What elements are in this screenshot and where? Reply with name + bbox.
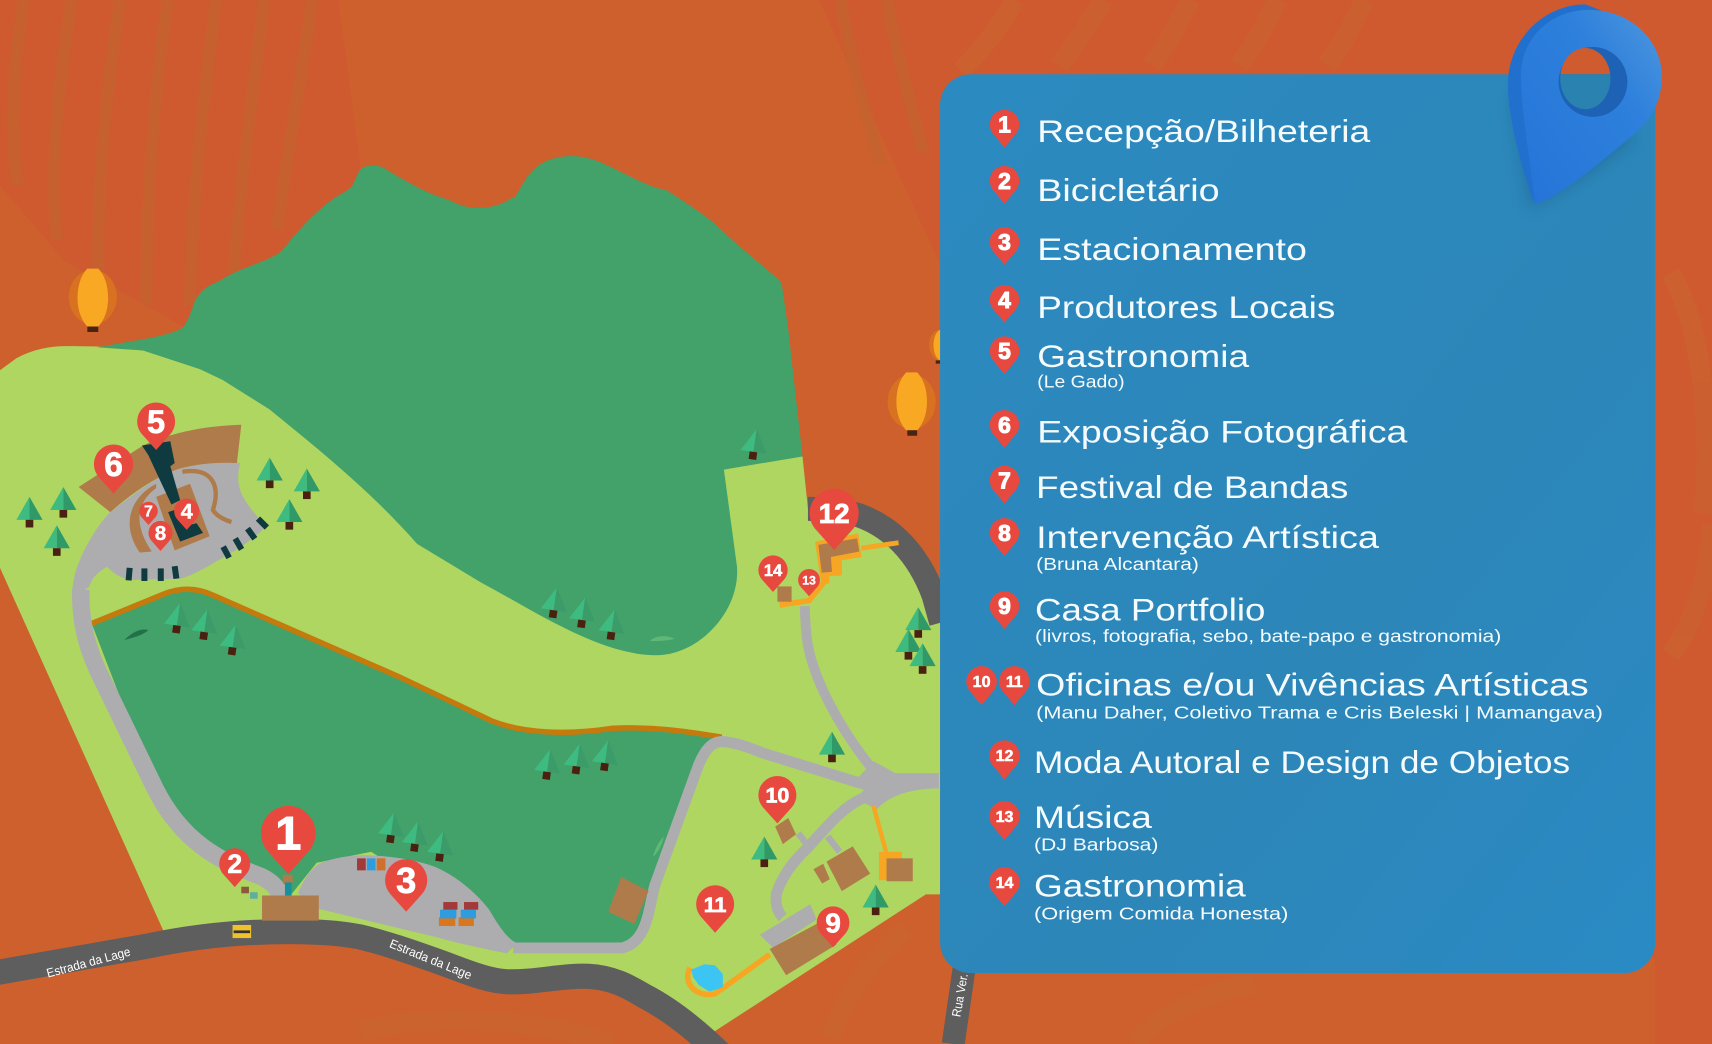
balloon left [69,269,117,332]
legend item 5: (Le Gado) [1037,372,1125,392]
legend item 1: 1 [998,112,1011,138]
legend item 7: 7 [998,468,1011,494]
legend item 2: 2 [998,168,1011,194]
map pin 13: 13 [802,573,816,587]
road labels: Rua Ver. [949,973,971,1018]
legend item 5: 5 [998,338,1011,364]
road labels: Estrada da Lage [45,945,132,981]
gray junction [857,761,939,809]
map pin 13 [798,569,820,596]
legend item 3 [990,227,1307,267]
legend item 9: 9 [998,593,1011,619]
legend item 3: 3 [998,229,1011,255]
map pin 7 [139,502,158,525]
map pin 12 [810,489,859,550]
map pin 14 [758,555,788,592]
legend item 9 [990,591,1501,646]
bushes [124,629,675,857]
brown curved path [182,471,231,522]
legend item 6: 6 [998,412,1011,438]
legend item 4 [990,285,1335,325]
bicycles [241,887,258,899]
main road: Estrada da Lage [0,932,726,1044]
panel: legend [940,74,1655,973]
legend item 1: Recepção/Bilheteria [1037,113,1371,149]
legend item 10 and 11: (Manu Daher, Coletivo Trama e Cris Beleski | Mamangava) [1036,703,1603,723]
legend item 6 [990,410,1408,449]
legend item 10 and 11: 11 [1006,673,1023,691]
map pin 3: 3 [396,860,416,901]
legend item 13 [989,799,1158,855]
orange paths [688,543,899,995]
legend item 7: Festival de Bandas [1036,469,1348,505]
legend item 10 and 11: Oficinas e/ou Vivências Artísticas [1036,667,1589,703]
road: Rua Ver [953,961,965,1044]
map pin 5 [137,403,175,450]
balloon centre [888,372,936,436]
map pin 6: 6 [104,446,123,484]
map pin 5: 5 [147,403,165,440]
map pin 12: 12 [819,498,850,529]
map pin 4: 4 [181,499,193,524]
road labels [45,937,971,1018]
dark stage structures [126,441,269,581]
map pin 11: 11 [704,893,727,917]
buildings [79,425,913,975]
map pin 1: 1 [275,807,301,860]
cars group 2 [439,902,478,926]
legend item 13: 13 [996,808,1013,826]
legend item 10 and 11: 10 [973,673,991,691]
gray plaza top left [72,462,266,598]
icon: blue 3D location pin [1508,4,1662,207]
map pin 8 [148,521,173,551]
brown arc plaza [79,425,241,512]
road: upper right [808,509,941,622]
legend item 1 [990,110,1371,149]
balloon small [929,330,951,364]
trees [16,427,936,915]
map pin 4 [174,499,199,530]
map pin 7: 7 [144,504,153,521]
light green terrain [0,317,940,1033]
teal gate [285,882,292,895]
map pin 10 [758,776,796,824]
cars group 1 [357,858,385,870]
legend item 8: Intervenção Artística [1036,519,1379,555]
brown trail [92,589,722,737]
legend item 12: 12 [996,747,1013,765]
legend item 6: Exposição Fotográfica [1037,413,1408,449]
legend item 8: (Bruna Alcantara) [1036,554,1199,574]
legend item 13: Música [1034,799,1152,835]
dark green hill [97,156,803,655]
legend item 9: (livros, fotografia, sebo, bate-papo e gastronomia) [1035,626,1501,646]
legend item 10 and 11 [966,666,1603,723]
legend item 2: Bicicletário [1037,172,1220,208]
map pin 2: 2 [227,849,242,879]
legend item 8: 8 [998,520,1011,546]
map pin 9: 9 [825,907,841,939]
gray building lot [760,904,817,948]
pond [691,964,723,992]
map pin 6 [94,444,133,494]
map pin 1 [261,806,316,874]
map pin 11 [696,885,734,933]
legend item 5: Gastronomia [1037,338,1250,374]
legend item 4: Produtores Locais [1037,289,1335,325]
legend item 14 [989,867,1288,924]
legend item 5 [990,336,1250,392]
legend item 12: Moda Autoral e Design de Objetos [1034,744,1570,780]
legend item 14: 14 [996,874,1013,892]
gray parking [298,855,518,953]
map pin 2 [219,848,250,887]
map pin 9 [817,906,849,947]
orange platforms [815,533,861,585]
road labels: Estrada da Lage [387,937,474,982]
legend item 7 [990,466,1348,505]
map pin 8: 8 [155,522,166,545]
legend item 14: (Origem Comida Honesta) [1034,904,1288,924]
legend item 14: Gastronomia [1034,868,1246,904]
legend item 3: Estacionamento [1037,231,1307,267]
legend item 9: Casa Portfolio [1035,591,1265,627]
dark green lower field [92,589,722,946]
legend item 2 [990,166,1220,208]
map pin 3 [385,859,427,912]
map pin 10: 10 [765,784,789,808]
gray roads [81,590,876,948]
bus [233,925,251,938]
gray paths [72,462,939,953]
legend item 8 [990,518,1379,574]
legend item 13: (DJ Barbosa) [1034,835,1158,855]
legend item 4: 4 [998,287,1011,313]
map pin 14: 14 [764,561,783,580]
